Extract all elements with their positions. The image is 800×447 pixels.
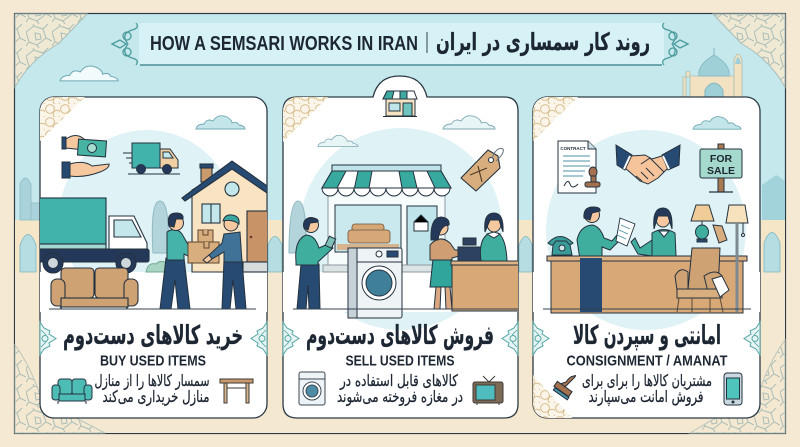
description <box>94 371 210 407</box>
person: client <box>576 206 618 256</box>
contract <box>558 141 596 193</box>
right side dome <box>762 165 785 220</box>
rubber stamp <box>585 167 600 187</box>
pale circle <box>62 130 220 272</box>
for sale sign: FOR <box>710 153 732 165</box>
icon: stamp <box>553 376 576 400</box>
corner ornament: bottom left <box>15 345 105 433</box>
icon: phone <box>724 373 742 405</box>
cash register <box>458 238 480 260</box>
description <box>582 371 712 407</box>
icon: tv <box>473 376 503 405</box>
side ornament: right <box>251 322 267 355</box>
heading: English: BUY USED ITEMS <box>100 352 206 370</box>
panel: consignment <box>533 97 760 418</box>
banner ornament: left <box>112 23 137 65</box>
heading: English: SELL USED ITEMS <box>346 352 454 370</box>
clouds <box>443 116 495 129</box>
title banner <box>112 23 688 65</box>
chair <box>675 248 729 312</box>
pale circle <box>300 128 502 330</box>
panel: sell used items <box>283 76 522 418</box>
desk <box>547 256 747 313</box>
description: کالاهای قابل استفاده در <box>339 371 458 391</box>
side ornament: right <box>744 322 760 355</box>
pale circle <box>546 130 746 330</box>
beige street wall <box>15 220 785 433</box>
client legs in front of desk <box>580 258 602 312</box>
sofa <box>51 268 138 309</box>
banner ornament: right <box>663 23 688 65</box>
person: cashier <box>480 213 507 261</box>
for sale sign: SALE <box>707 165 735 177</box>
cloud: top left <box>60 66 118 81</box>
corner lattice <box>40 97 85 141</box>
icon: money hands <box>62 136 109 178</box>
storefront <box>322 165 451 272</box>
mini sofa in window <box>348 224 390 243</box>
person: worker <box>203 215 246 309</box>
person: customer <box>296 218 336 309</box>
washing machine <box>348 248 402 318</box>
heading: English: CONSIGNMENT / AMANAT <box>566 352 728 370</box>
title: Persian: روند کار سمساری در ایران <box>436 28 650 56</box>
person: shopper <box>429 216 458 308</box>
tree <box>289 201 306 253</box>
mosque: top right <box>683 48 742 97</box>
icon: delivery truck <box>123 143 180 174</box>
side ornament: right <box>502 322 518 355</box>
ground line <box>49 308 256 310</box>
description: منازل خریداری می‌کند <box>102 387 210 407</box>
icon: table <box>220 379 253 403</box>
person: buyer <box>160 213 206 309</box>
description: در مغازه فروخته می‌شوند <box>337 387 463 407</box>
cloud <box>196 116 245 129</box>
side ornament: left <box>533 322 549 355</box>
side ornament: left <box>40 322 56 355</box>
side ornament: left <box>283 322 299 355</box>
corner ornament: bottom right <box>690 340 785 433</box>
document <box>616 218 635 246</box>
floor lamp <box>726 205 748 312</box>
corner ornament: top left <box>15 14 87 87</box>
description: سمسار کالاها را از منازل <box>94 371 210 391</box>
description: فروش امانت می‌سپارند <box>588 387 704 407</box>
background arches <box>20 232 780 272</box>
icon: washer <box>299 372 325 405</box>
icon: teal sofa <box>52 379 92 404</box>
cloud <box>693 117 741 129</box>
left minaret <box>20 178 40 220</box>
corner lattice <box>283 97 328 142</box>
boxes <box>188 230 219 263</box>
ground line <box>293 308 518 310</box>
shrub <box>145 260 165 272</box>
heading: Persian: فروش کالاهای دست‌دوم <box>306 321 494 351</box>
person: agent <box>631 208 676 256</box>
description: مشتریان کالاها را برای برای <box>582 371 712 391</box>
handshake <box>616 145 680 184</box>
heading: Persian: خرید کالاهای دست‌دوم <box>63 321 243 351</box>
price tag <box>461 148 503 191</box>
for sale sign <box>700 144 742 192</box>
tree <box>152 201 168 253</box>
icon: small shop <box>383 91 417 116</box>
title: English: HOW A SEMSARI WORKS IN IRAN <box>150 33 418 55</box>
panel: buy used items <box>30 97 270 418</box>
table lamp <box>691 205 727 243</box>
moving truck <box>30 198 149 273</box>
corner ornament: top right <box>713 14 785 87</box>
description <box>337 371 463 407</box>
corner lattice <box>533 97 578 141</box>
telephone <box>548 236 573 255</box>
ground line <box>543 308 751 310</box>
contract label: CONTRACT <box>560 146 586 151</box>
house <box>182 161 270 272</box>
counter <box>451 261 522 311</box>
